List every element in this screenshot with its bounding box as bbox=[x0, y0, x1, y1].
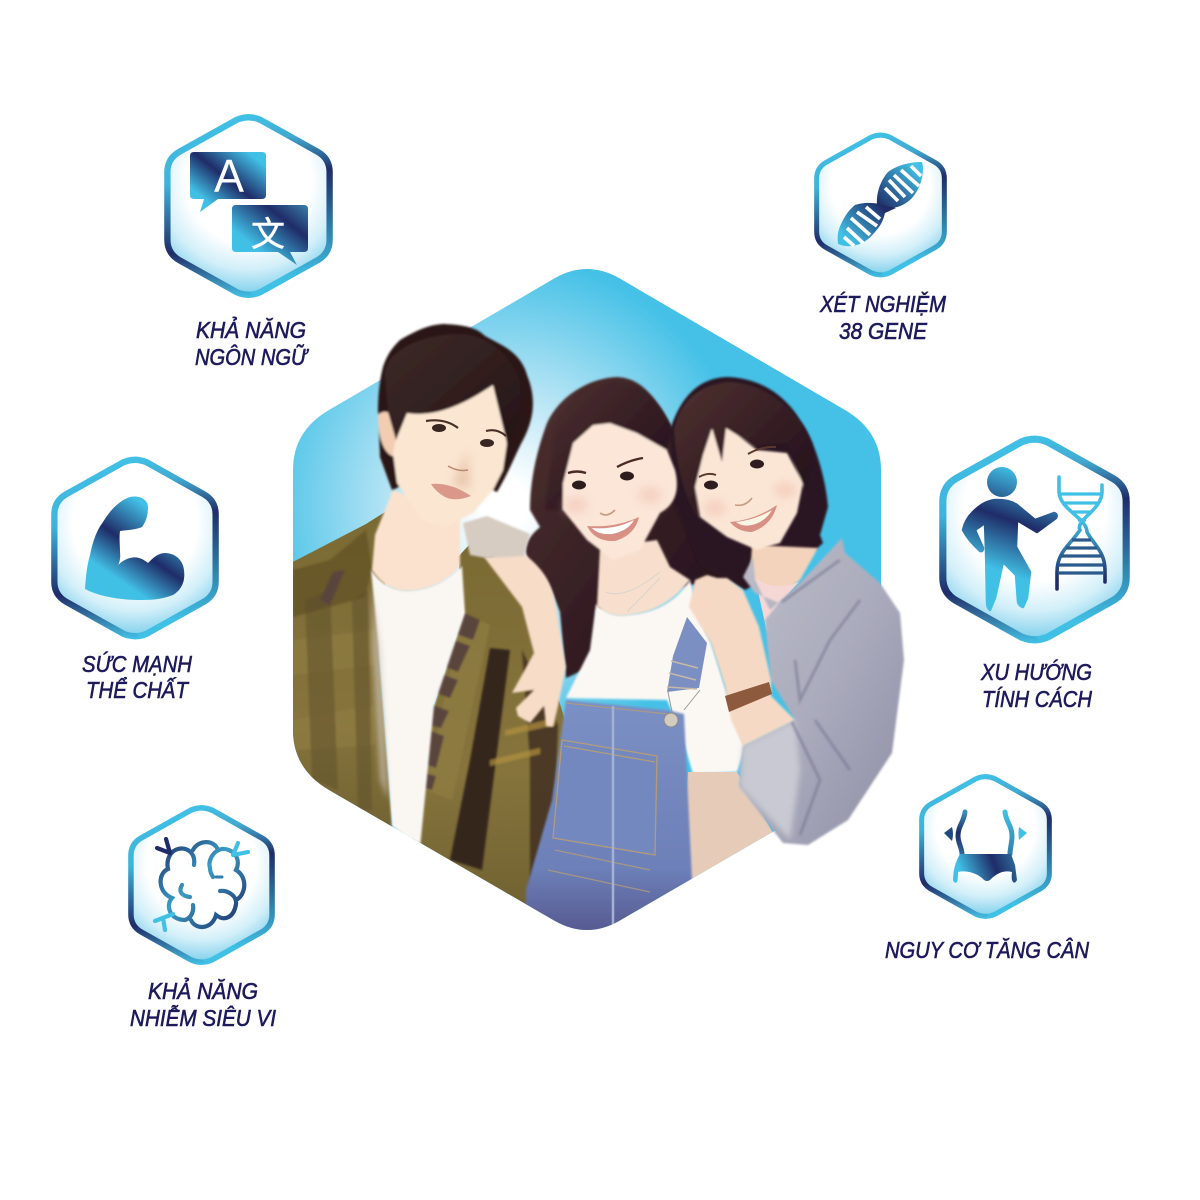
label: KHẢ NĂNG bbox=[148, 976, 258, 1004]
icon: translation speech bubbles: 文 bbox=[251, 216, 285, 254]
hexagon frame bbox=[131, 808, 272, 962]
middle girl hair front bbox=[545, 381, 672, 510]
panel: weight gain risk bbox=[885, 777, 1089, 963]
hexagon sky background bbox=[293, 269, 881, 930]
hexagon frame bbox=[167, 117, 330, 295]
denim overalls bbox=[525, 700, 692, 940]
panel: physical strength bbox=[54, 460, 216, 703]
label: KHẢ NĂNG bbox=[196, 315, 306, 343]
girl arm below sleeve bbox=[680, 772, 772, 886]
boy head bbox=[378, 324, 533, 525]
right girl pink top bbox=[755, 578, 799, 632]
label: XU HƯỚNG bbox=[980, 659, 1092, 685]
label bbox=[82, 651, 192, 703]
icon: person with DNA bbox=[963, 467, 1105, 610]
label bbox=[819, 291, 947, 344]
boy face bbox=[393, 385, 507, 525]
label: TÍNH CÁCH bbox=[982, 686, 1092, 712]
boy fringe bbox=[385, 334, 522, 452]
right girl fringe bbox=[674, 382, 812, 518]
boy jacket plaid shading bbox=[293, 530, 558, 900]
boy white t-shirt bbox=[371, 566, 465, 848]
right girl neck bbox=[750, 545, 818, 600]
label: THỂ CHẤT bbox=[86, 676, 190, 703]
icon: virus cell outline bbox=[155, 839, 248, 930]
boy t-shirt soft shadow bbox=[372, 585, 388, 800]
panel: language ability bbox=[167, 117, 330, 370]
boy sleeve bbox=[463, 516, 530, 558]
boy hair rear bbox=[378, 324, 533, 492]
right girl face bbox=[695, 427, 803, 550]
watch bbox=[725, 682, 772, 712]
label bbox=[195, 315, 309, 370]
clipped clothing and bodies bbox=[285, 377, 795, 940]
icon: translation speech bubbles: A bbox=[214, 150, 244, 202]
label: XÉT NGHIỆM bbox=[819, 291, 947, 317]
boy ear bbox=[378, 412, 398, 457]
icon: flexed arm muscle bbox=[85, 497, 184, 600]
right girl facial features bbox=[699, 447, 796, 532]
panel: virus infection bbox=[130, 808, 277, 1031]
label: 38 GENE bbox=[839, 318, 928, 344]
strap buckle and stitches bbox=[664, 661, 700, 727]
boy facial features bbox=[426, 420, 506, 499]
hexagon frame bbox=[922, 777, 1049, 916]
icon: waist and hips bbox=[944, 812, 1027, 883]
right girl grey jacket bbox=[739, 538, 904, 845]
boy neck bbox=[372, 490, 460, 591]
middle girl face bbox=[563, 423, 677, 560]
right girl head bbox=[674, 382, 812, 550]
icon: DNA helix bbox=[838, 162, 923, 246]
central photo panel bbox=[285, 269, 904, 940]
label: NGUY CƠ TĂNG CÂN bbox=[885, 937, 1089, 963]
middle girl hair back bbox=[526, 377, 745, 678]
jacket fold shadows and light sleeve bbox=[740, 560, 860, 840]
hexagon frame bbox=[943, 439, 1126, 640]
label bbox=[130, 976, 277, 1031]
middle girl head bbox=[545, 381, 690, 616]
middle girl neck bbox=[597, 540, 690, 616]
group of three young people bbox=[285, 324, 904, 940]
label bbox=[980, 659, 1092, 712]
label: NHIỄM SIÊU VI bbox=[130, 1003, 277, 1031]
middle girl facial features bbox=[564, 458, 662, 612]
hexagon frame bbox=[54, 460, 216, 636]
overalls pocket and seams bbox=[548, 703, 667, 930]
boy jacket right panel bbox=[410, 535, 565, 930]
boy jacket left panel bbox=[293, 512, 392, 827]
middle girl white top bbox=[566, 580, 745, 774]
hexagon frame bbox=[817, 135, 944, 275]
right girl arm and hand bbox=[689, 575, 795, 746]
panel: 38 gene test bbox=[817, 135, 947, 344]
panel: personality tendency bbox=[943, 439, 1126, 712]
overalls strap bbox=[667, 617, 707, 692]
right girl hair back bbox=[671, 377, 828, 590]
icon: translation speech bubbles bbox=[190, 150, 308, 265]
label: NGÔN NGỮ bbox=[195, 343, 309, 370]
label: SỨC MẠNH bbox=[82, 651, 192, 677]
boy arm resting on girl's shoulder bbox=[484, 553, 566, 727]
